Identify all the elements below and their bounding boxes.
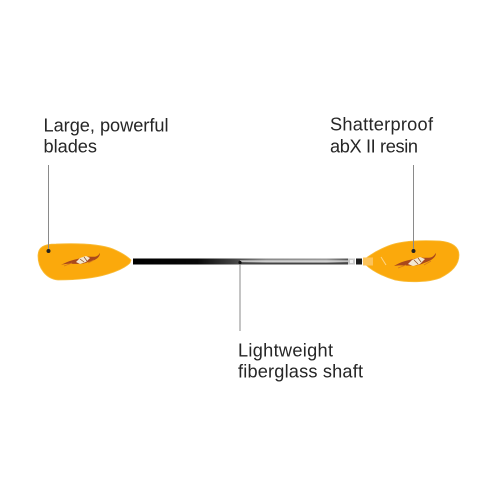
left paddle blade bbox=[38, 244, 131, 280]
callout: fiberglass shaft: fiberglass shaft bbox=[238, 362, 363, 382]
callout: shatterproof resin: Shatterproof bbox=[330, 114, 434, 134]
callout: large, powerful blades: Large, powerful bbox=[44, 116, 168, 136]
callout: large, powerful blades: blades bbox=[44, 136, 97, 156]
callout: large, powerful blades bbox=[44, 116, 168, 253]
right paddle blade bbox=[363, 241, 459, 282]
callout: fiberglass shaft bbox=[238, 261, 363, 382]
callout: shatterproof resin bbox=[330, 114, 434, 253]
paddle shaft bbox=[133, 258, 362, 264]
callout: fiberglass shaft: Lightweight bbox=[238, 340, 333, 360]
callout: shatterproof resin: abX II resin bbox=[330, 136, 418, 156]
